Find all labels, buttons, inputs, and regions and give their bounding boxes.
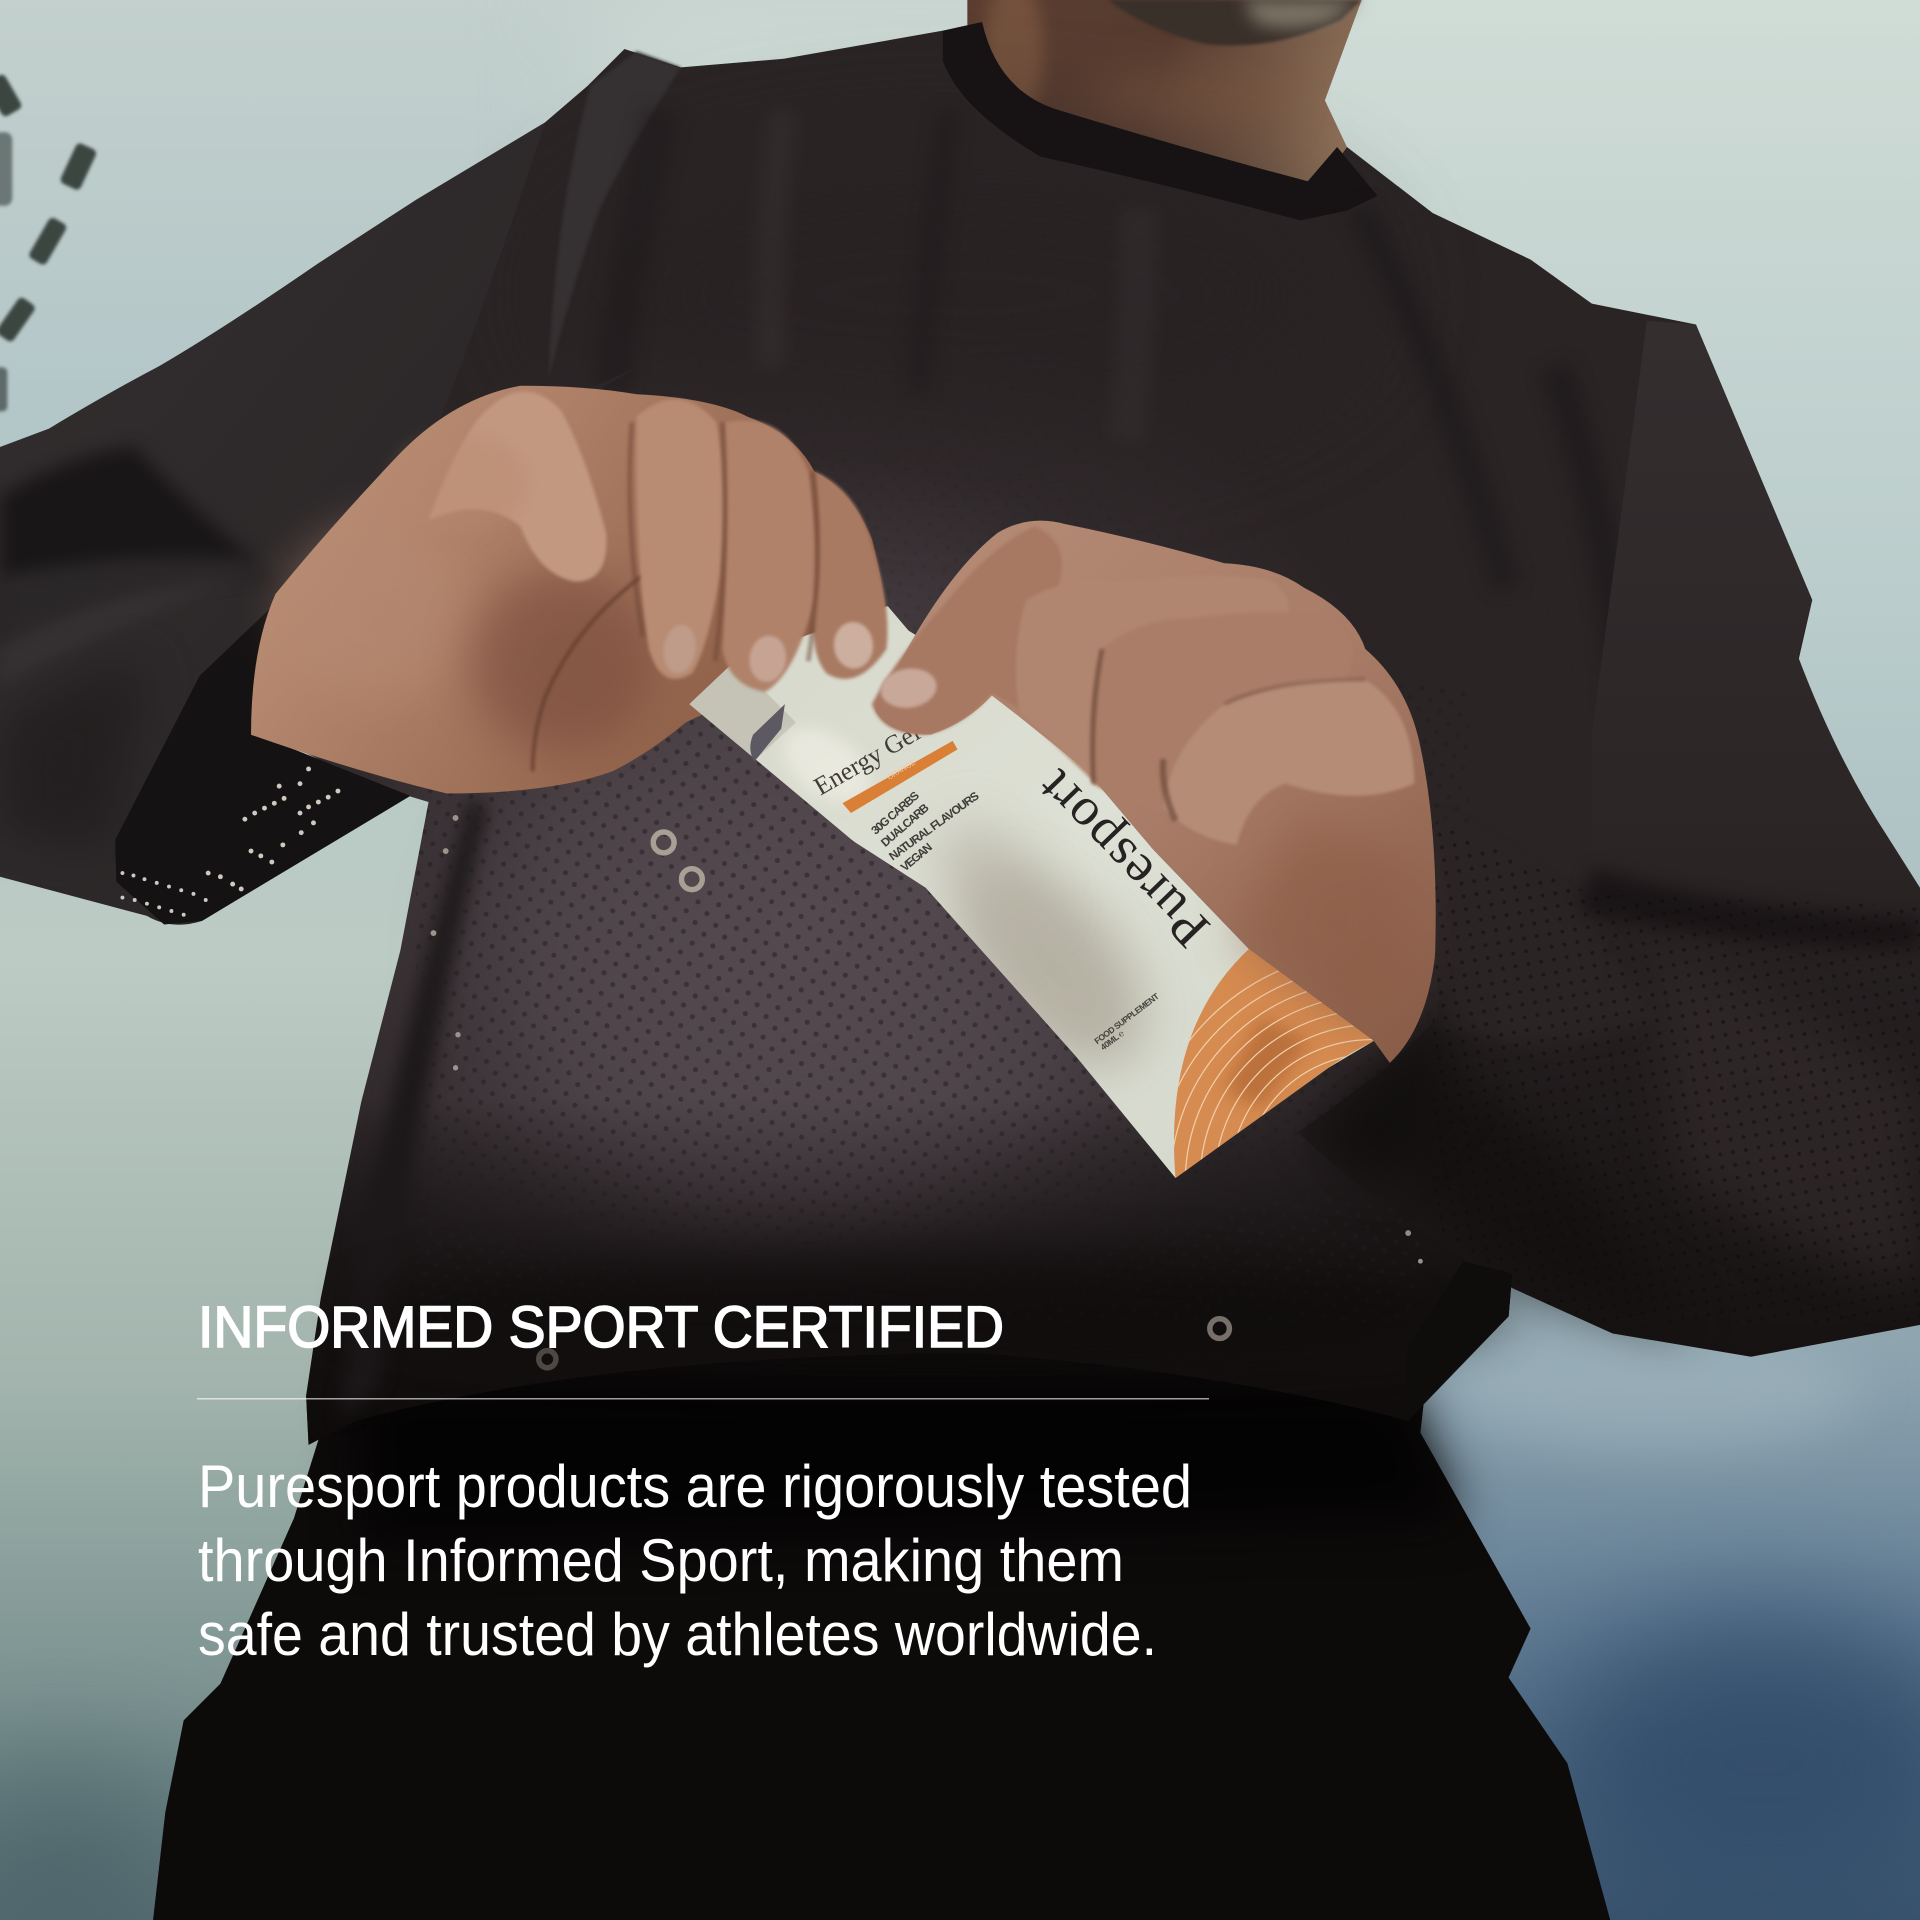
heading: INFORMED SPORT CERTIFIED	[198, 1295, 1004, 1360]
thumb	[872, 527, 1062, 735]
body text: Puresport products are rigorously tested	[198, 1453, 1192, 1520]
divider line	[197, 1398, 1209, 1400]
sachet text: claims: VEGAN	[898, 841, 935, 874]
sachet text: claims: NATURAL FLAVOURS	[887, 789, 982, 863]
pants	[153, 1322, 1610, 1920]
orange flavour bar: ORANGE	[885, 758, 917, 782]
index finger	[429, 391, 606, 582]
sachet text: claims: DUALCARB	[879, 801, 932, 850]
right hand holding the sachet	[872, 521, 1436, 1063]
little finger	[813, 471, 888, 679]
collar	[943, 22, 1378, 220]
thumbnail	[878, 665, 939, 711]
eyelets	[539, 832, 1229, 1368]
orange flavour bar	[842, 741, 958, 813]
sachet text: claims: 30G CARBS	[869, 789, 922, 837]
shirt torso	[147, 22, 1812, 1445]
left palm behind the sachet	[251, 386, 888, 793]
sachet text: supplement label: 40ML ℮	[1098, 1028, 1126, 1052]
sachet text: supplement label: FOOD SUPPLEMENT	[1092, 990, 1162, 1046]
middle finger	[636, 399, 724, 679]
right sleeve and forearm	[1298, 321, 1920, 1420]
sachet text: product name: Energy Gel	[809, 717, 925, 801]
left hand fingers over the tear strip	[392, 391, 888, 692]
shirt folds	[549, 51, 681, 380]
body text	[198, 1453, 1192, 1668]
neck and chin	[967, 0, 1362, 202]
sachet wordmark: Puresport	[1025, 759, 1221, 959]
gel sachet	[690, 606, 1374, 1178]
sachet logo mark	[750, 704, 785, 762]
fingernails	[660, 621, 875, 684]
fist fingers	[1016, 576, 1414, 845]
left sleeve	[0, 122, 637, 925]
body text: safe and trusted by athletes worldwide.	[198, 1601, 1157, 1668]
tree branch with leaves at top left	[0, 73, 98, 411]
body text: through Informed Sport, making them	[198, 1527, 1124, 1594]
orange end with pinstripes	[1174, 949, 1374, 1178]
ring finger	[722, 420, 816, 692]
